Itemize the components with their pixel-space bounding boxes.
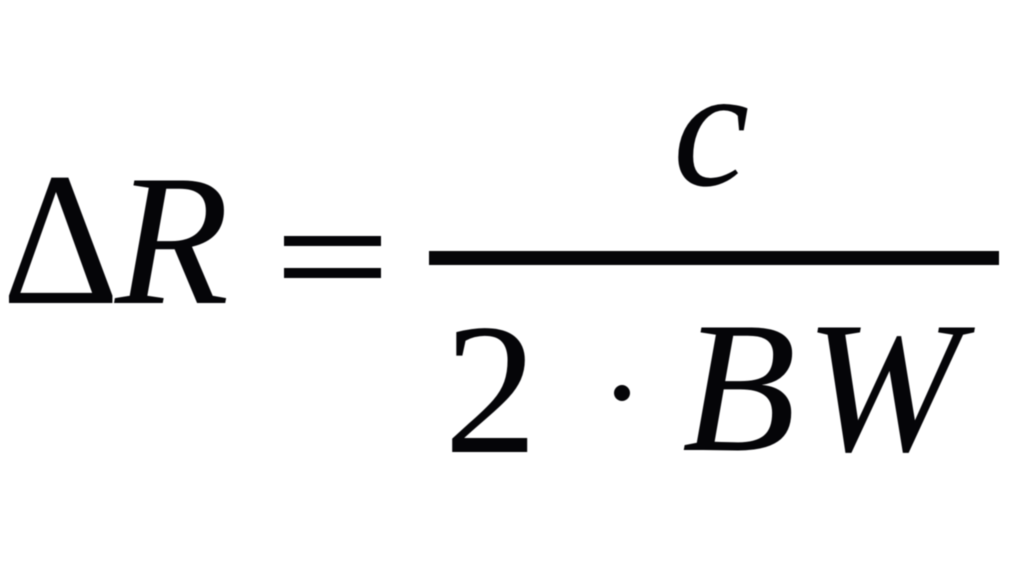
denominator: 2 · BW: B [682, 284, 796, 491]
left side: delta R: Δ [2, 135, 119, 345]
left side: delta R [2, 135, 229, 345]
fraction bar [429, 251, 999, 265]
equals sign [284, 236, 381, 278]
left side: delta R: R [114, 137, 229, 344]
denominator: 2 · BW: W [805, 284, 975, 491]
denominator: 2 · BW [444, 284, 975, 493]
denominator: 2 · BW: 2 [444, 286, 538, 493]
numerator: c: c [673, 33, 749, 223]
